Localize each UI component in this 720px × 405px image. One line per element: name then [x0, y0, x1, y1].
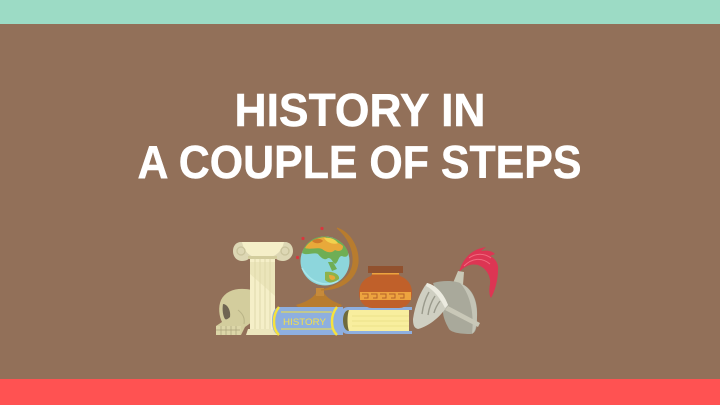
icon: closed book — [339, 307, 412, 334]
bottom band — [0, 379, 720, 405]
icon: clay vase — [359, 266, 412, 308]
title — [138, 84, 582, 188]
icon: ionic column — [233, 242, 293, 335]
icon: history book — [272, 307, 343, 335]
icon: red plume — [459, 247, 498, 298]
icon: globe — [296, 227, 358, 307]
title: HISTORY IN — [234, 84, 486, 136]
icon: knight helmet — [413, 271, 480, 334]
title: A COUPLE OF STEPS — [138, 136, 582, 188]
top band — [0, 0, 720, 24]
icon: skull — [216, 289, 252, 335]
icon: history book: HISTORY — [283, 317, 327, 328]
